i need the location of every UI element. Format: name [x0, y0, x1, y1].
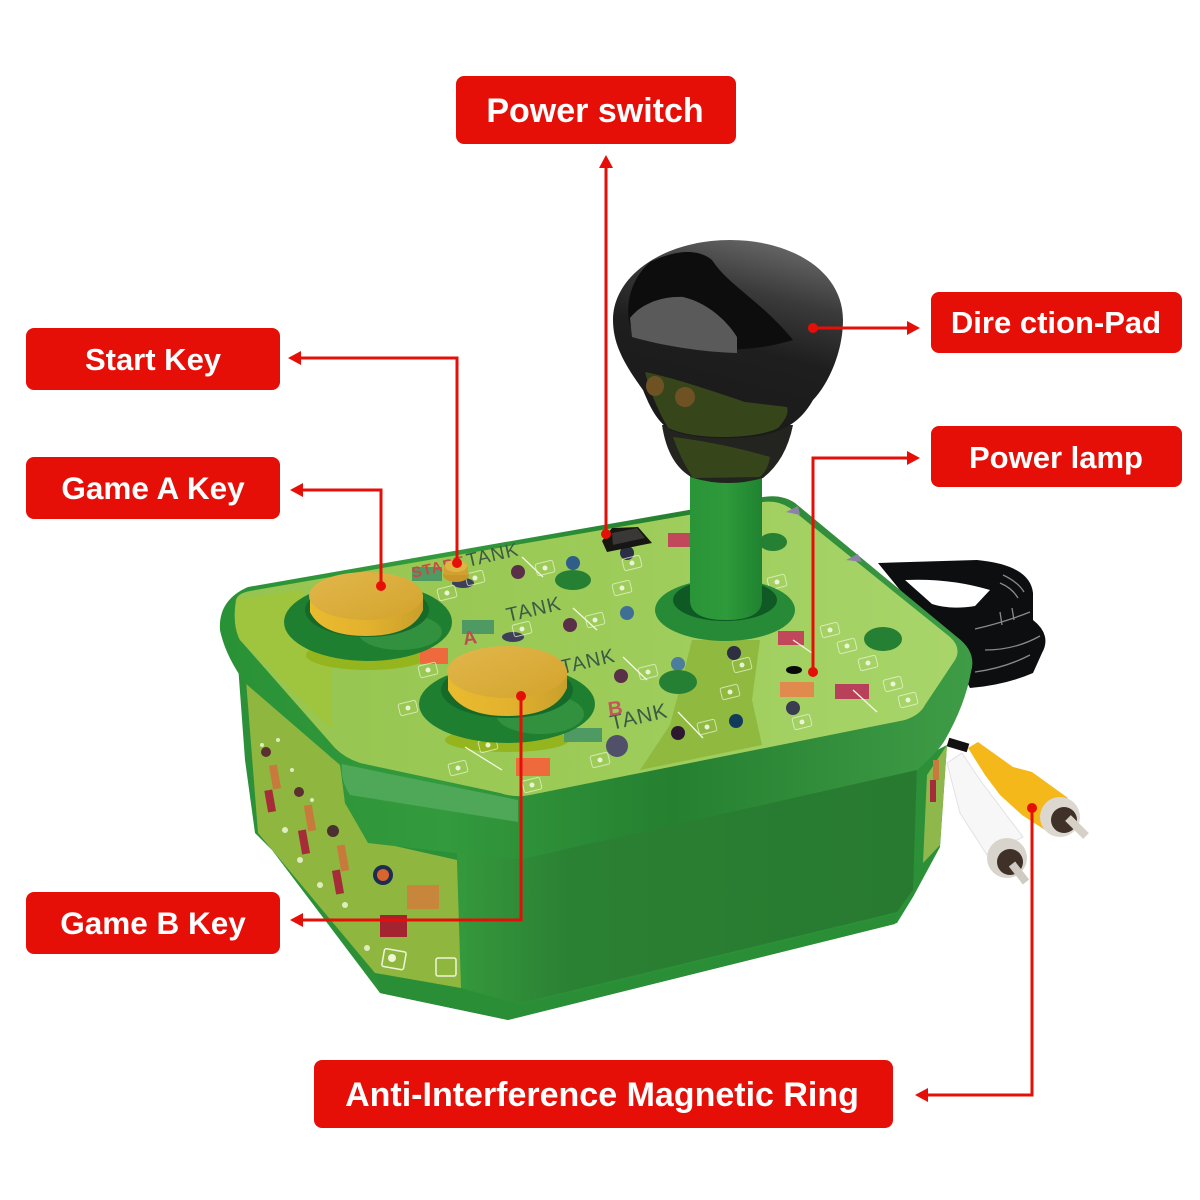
- body: left shell: [238, 665, 947, 1020]
- neck camo: [673, 437, 770, 478]
- knob camo: [645, 372, 788, 437]
- rim highlight: [342, 764, 518, 822]
- printed text: TANK: [464, 539, 521, 572]
- game A key: [284, 572, 452, 661]
- body: front face: [457, 765, 917, 1003]
- AV cables and connectors: [947, 742, 1086, 882]
- shaft: [690, 475, 762, 620]
- game B key: [419, 646, 595, 743]
- printed text: [410, 539, 670, 735]
- callout: power lamp: [808, 426, 1182, 677]
- callout: game A key: Game A Key: [61, 470, 245, 506]
- left sticker icons: [260, 738, 456, 976]
- callout: power switch: [456, 76, 736, 539]
- white plug: [947, 753, 1023, 855]
- rim: [220, 496, 972, 859]
- callout: direction pad: Dire ction-Pad: [951, 305, 1161, 340]
- start key: [443, 560, 469, 582]
- callout: game B key: Game B Key: [60, 905, 246, 941]
- right sticker icons: [930, 760, 939, 802]
- callout: anti-interference magnetic ring: [314, 803, 1037, 1128]
- purple corner marks: [786, 506, 800, 515]
- knob reflections: [628, 252, 793, 350]
- callout: start key: Start Key: [85, 342, 222, 377]
- controller: [220, 240, 972, 1020]
- top face olive shading: [235, 590, 332, 730]
- callout: anti-interference magnetic ring: Anti-Interference Magnetic Ring: [345, 1076, 859, 1114]
- printed text: A: [462, 627, 479, 650]
- printed text: START: [410, 553, 466, 582]
- cable coil: [878, 560, 1045, 688]
- white streaks: [465, 557, 877, 770]
- printed text: TANK: [558, 645, 618, 679]
- printed text: TANK: [608, 699, 670, 735]
- knob: [613, 240, 843, 438]
- callout: power switch: Power switch: [486, 92, 704, 130]
- callout: direction pad: [808, 292, 1182, 353]
- printed text: B: [607, 697, 624, 721]
- callout: game A key: [26, 457, 386, 591]
- yellow plug: [968, 742, 1068, 830]
- collar: [655, 579, 795, 641]
- power lamp hole: [786, 666, 802, 674]
- power switch: [602, 527, 652, 552]
- screws: [555, 570, 591, 590]
- callout: game B key: [26, 691, 526, 954]
- printed text: TANK: [504, 593, 564, 627]
- body: right sticker panel: [923, 745, 947, 863]
- direction stick: [613, 240, 843, 641]
- black wire stub: [948, 742, 968, 748]
- tank pictograms: [412, 567, 442, 581]
- callout: power lamp: Power lamp: [969, 440, 1143, 475]
- top face printed icons: [398, 506, 918, 793]
- hex tokens: [511, 565, 525, 579]
- top face: [235, 502, 958, 796]
- body: left sticker panel: [246, 680, 461, 988]
- callout: start key: [26, 328, 462, 568]
- body: base skirt: [375, 914, 897, 1020]
- spoon squares: [398, 700, 418, 716]
- neck: [662, 425, 793, 483]
